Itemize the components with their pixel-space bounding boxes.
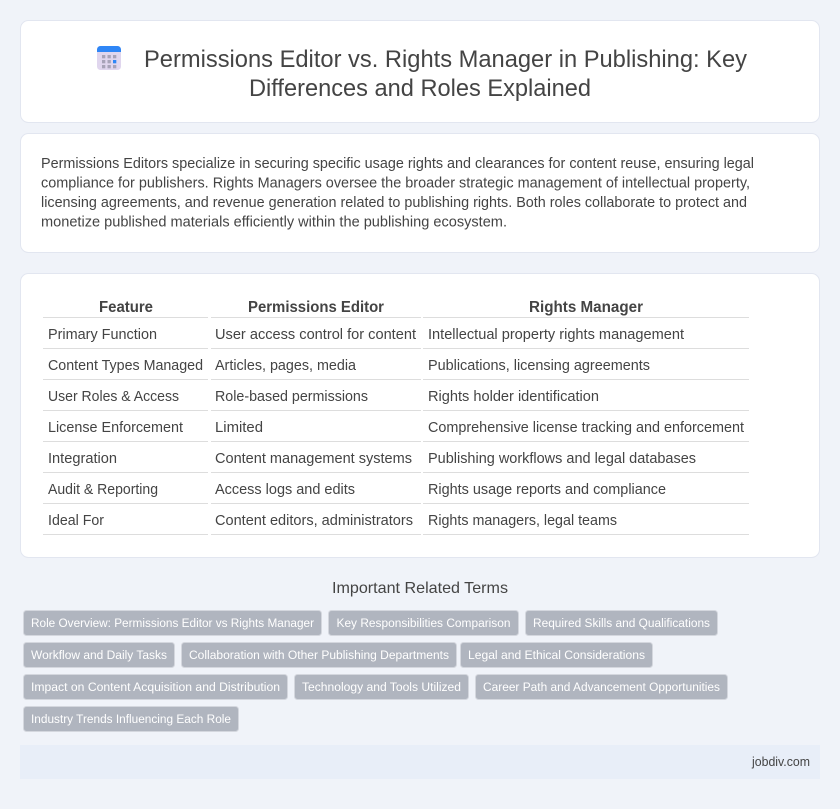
text block: introduction: Permissions Editors specialize in securing specific usage rights and clearances for content reuse, ensuring legal — [41, 156, 754, 172]
table header row: Feature — [99, 299, 153, 316]
row: integration: Content management systems — [215, 451, 412, 467]
tag — [24, 610, 322, 636]
row: license enforcement: Comprehensive license tracking and enforcement — [428, 420, 744, 436]
row: integration: Integration — [48, 451, 117, 467]
tag: Role Overview: Permissions Editor vs Rights Manager — [31, 616, 314, 630]
tag — [24, 642, 174, 668]
tag — [328, 610, 518, 636]
row: audit and reporting: Access logs and edits — [215, 482, 355, 498]
tag — [294, 674, 468, 700]
row: ideal for: Rights managers, legal teams — [428, 513, 617, 529]
row: primary function: Primary Function — [48, 327, 157, 343]
tag — [476, 674, 728, 700]
tag — [460, 642, 652, 668]
row: user roles and access: User Roles & Access — [48, 389, 179, 405]
row: ideal for: Ideal For — [48, 513, 104, 529]
row: audit and reporting: Audit & Reporting — [48, 482, 158, 498]
tag: Industry Trends Influencing Each Role — [31, 712, 231, 726]
panel: comparison table — [20, 274, 820, 558]
row: integration — [43, 451, 749, 472]
related terms tags — [24, 610, 728, 732]
row: ideal for: Content editors, administrators — [215, 513, 413, 529]
row: audit and reporting: Rights usage reports and compliance — [428, 482, 666, 498]
table header row: Permissions Editor — [248, 299, 384, 316]
tag — [526, 610, 718, 636]
row: license enforcement: Limited — [215, 420, 263, 436]
title — [144, 46, 747, 102]
text block: introduction: compliance for publishers. Rights Managers oversee the broader strategic management of intellectual property, — [41, 176, 750, 192]
row: primary function: Intellectual property rights management — [428, 327, 684, 343]
tag — [24, 674, 288, 700]
row: audit and reporting — [43, 482, 749, 504]
tag: Collaboration with Other Publishing Departments — [189, 648, 449, 662]
row: primary function: User access control for content — [215, 327, 416, 343]
tag: Required Skills and Qualifications — [533, 616, 710, 630]
tag: Technology and Tools Utilized — [302, 680, 461, 694]
row: integration: Publishing workflows and legal databases — [428, 451, 696, 467]
tag: Key Responsibilities Comparison — [336, 616, 511, 630]
panel: header — [20, 20, 820, 122]
footer — [20, 745, 820, 779]
row: user roles and access: Rights holder identification — [428, 389, 599, 405]
tag: Workflow and Daily Tasks — [31, 648, 167, 662]
text block: introduction: licensing agreements, and revenue generation related to publishing rights. Both roles collaborate to protect and — [41, 195, 747, 211]
panel: introduction — [20, 134, 820, 252]
row: content types managed: Content Types Managed — [48, 358, 203, 374]
heading: important related terms: Important Related Terms — [332, 580, 508, 597]
row: primary function — [43, 327, 749, 348]
tag — [24, 706, 238, 732]
row: license enforcement — [43, 420, 749, 442]
tag — [182, 642, 456, 668]
title: Permissions Editor vs. Rights Manager in Publishing: Key — [144, 46, 747, 73]
table header row — [43, 299, 749, 318]
row: content types managed — [43, 358, 749, 380]
icon: calendar grid — [97, 46, 121, 70]
tag: Impact on Content Acquisition and Distribution — [31, 680, 280, 694]
row: content types managed: Articles, pages, media — [215, 358, 356, 374]
row: content types managed: Publications, licensing agreements — [428, 358, 650, 374]
row: license enforcement: License Enforcement — [48, 420, 183, 436]
row: user roles and access — [43, 389, 749, 410]
footer: jobdiv.com — [751, 755, 810, 769]
tag: Career Path and Advancement Opportunities — [483, 680, 720, 694]
table header row: Rights Manager — [529, 299, 643, 316]
text block: introduction: monetize published materials efficiently within the publishing ecosystem. — [41, 214, 507, 230]
row: ideal for — [43, 513, 749, 534]
text block: introduction — [41, 156, 754, 230]
title: Differences and Roles Explained — [249, 75, 591, 102]
tag: Legal and Ethical Considerations — [468, 648, 645, 662]
row: user roles and access: Role-based permissions — [215, 389, 368, 405]
